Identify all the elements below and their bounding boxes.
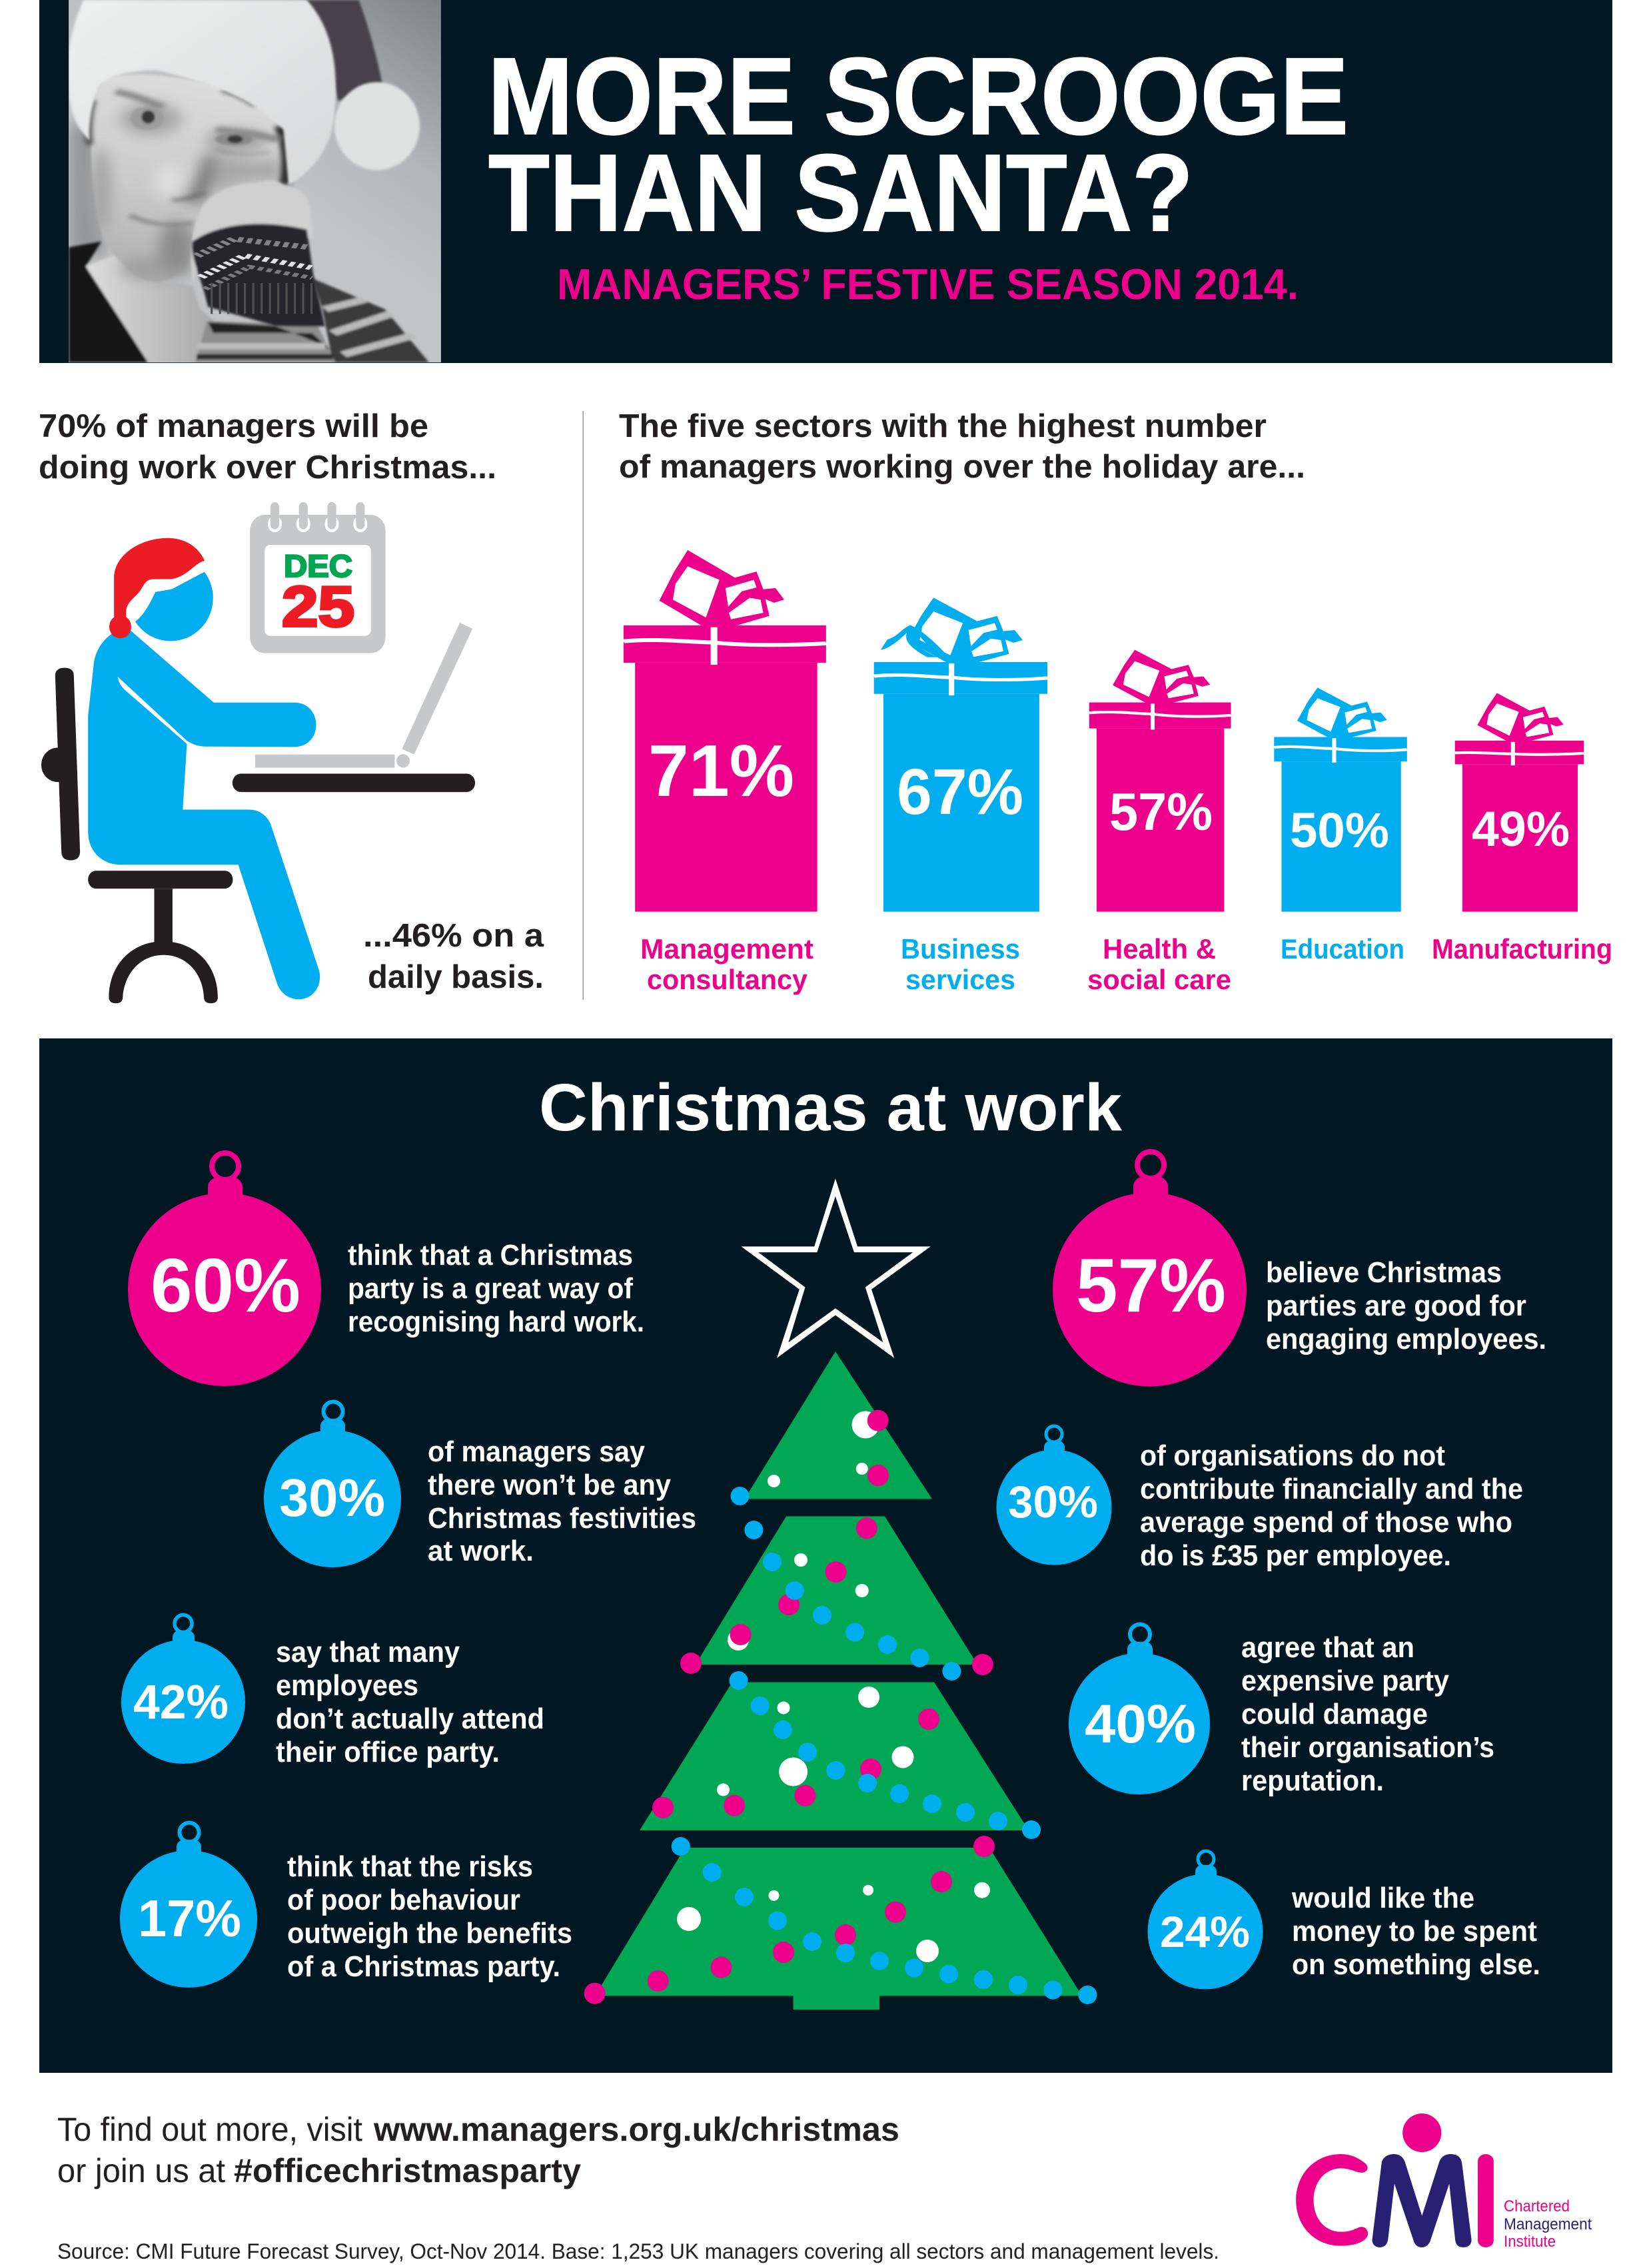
stat: 24%: 24% (1160, 1907, 1250, 1956)
stat: 30% no festivities: Christmas festivities (428, 1502, 696, 1535)
tree ornaments: blue (672, 1487, 1097, 2004)
heading: five sectors (619, 408, 1305, 485)
stat: 57%: engaging employees. (1266, 1323, 1546, 1355)
stat: 30% no financial contribution: contribute financially and the (1140, 1473, 1523, 1505)
logo: CMI (1296, 2113, 1592, 2251)
stat: 30% no financial contribution: 30% (1008, 1477, 1098, 1527)
stat: 57% (1053, 1152, 1546, 1387)
gift bar: management consultancy 71%: consultancy (647, 964, 808, 995)
christmas tree (584, 1351, 1097, 2010)
calendar date (282, 548, 354, 639)
photo: santa hat (69, 0, 420, 186)
stat: 42%: 42% (133, 1676, 229, 1729)
desk (233, 774, 475, 792)
heading: 70% of managers (39, 408, 496, 486)
footer call to action (57, 2111, 899, 2189)
stat: 30% no financial contribution: do is £35 per employee. (1140, 1539, 1451, 1572)
stat: 24%: on something else. (1292, 1948, 1540, 1981)
gift bar: business services 67% (874, 597, 1047, 995)
gift bar: health and social care 57%: Health & (1103, 933, 1216, 964)
icon: seated person (88, 538, 320, 999)
stat: 30% no financial contribution (997, 1426, 1523, 1572)
icon: laptop (255, 623, 472, 768)
heading: 70% of managers: doing work over Christmas... (39, 450, 496, 486)
tree ornaments: pink (584, 1410, 995, 2004)
stat: 40%: expensive party (1241, 1665, 1449, 1697)
stat: 57%: 57% (1076, 1244, 1226, 1328)
stat: 42%: don’t actually attend (276, 1702, 544, 1735)
gift bar: education 50%: 50% (1290, 803, 1389, 858)
title: THAN SANTA? (488, 132, 1193, 254)
stat: 57%: parties are good for (1266, 1290, 1526, 1322)
text: 46% on a daily basis: daily basis. (368, 959, 544, 995)
stat: 40%: agree that an (1241, 1631, 1414, 1664)
footer call to action: or join us at (57, 2152, 225, 2189)
heading: five sectors: The five sectors with the highest number (619, 408, 1267, 444)
stat: 42%: their office party. (276, 1736, 500, 1768)
stat: 17%: think that the risks (287, 1850, 533, 1883)
stat: 17%: of a Christmas party. (287, 1950, 560, 1983)
stat: 24%: money to be spent (1292, 1915, 1537, 1948)
stat: 60%: recognising hard work. (348, 1306, 644, 1338)
stat: 17%: 17% (138, 1889, 241, 1948)
stat: 40%: their organisation’s (1241, 1731, 1494, 1764)
stat: 30% no festivities: of managers say (428, 1435, 645, 1468)
stat: 17%: of poor behaviour (287, 1884, 520, 1916)
stat: 17% (120, 1822, 572, 1988)
gift bar: health and social care 57%: 57% (1109, 782, 1213, 841)
stat: 30% no festivities: at work. (428, 1535, 534, 1567)
photo shading: face (92, 103, 283, 280)
gift bar: manufacturing 49%: Manufacturing (1432, 933, 1612, 964)
logo: CMI: Chartered (1504, 2197, 1570, 2215)
stat: 24%: would like the (1291, 1882, 1474, 1914)
stat: 60%: 60% (151, 1244, 300, 1328)
gift bar: education 50%: Education (1281, 933, 1404, 964)
icon: star (742, 1178, 931, 1358)
logo: CMI: Institute (1504, 2233, 1556, 2251)
stat: 40%: reputation. (1241, 1764, 1384, 1797)
gift bar: business services 67%: Business (901, 933, 1020, 964)
title (488, 35, 1349, 254)
gift bar: health and social care 57% (1087, 650, 1231, 995)
footer call to action: www.managers.org.uk/christmas (373, 2111, 899, 2148)
stat: 30% no festivities: there won’t be any (428, 1469, 671, 1501)
gift bar: education 50% (1274, 687, 1407, 964)
stat: 60% (128, 1153, 644, 1386)
gift bar: health and social care 57%: social care (1087, 964, 1231, 995)
gift bar: manufacturing 49% (1432, 693, 1612, 964)
stat: 42%: say that many (276, 1636, 460, 1669)
stat: 42% (121, 1615, 544, 1768)
icon: calendar (250, 502, 386, 653)
subtitle: MANAGERS’ FESTIVE SEASON 2014. (557, 260, 1299, 308)
gift bar: management consultancy 71%: Management (640, 933, 814, 964)
stat: 40%: could damage (1241, 1698, 1428, 1730)
photo details: eyes, brows, mouth (89, 89, 287, 224)
stat: 24% (1147, 1851, 1540, 1989)
heading: 70% of managers: 70% of managers will be (39, 408, 428, 444)
stat: 30% no festivities: 30% (279, 1468, 385, 1527)
title: MORE SCROOGE (488, 35, 1349, 157)
text: 46% on a daily basis: ...46% on a (363, 918, 544, 954)
photo: man in Santa hat (69, 0, 441, 362)
stat: 60%: think that a Christmas (348, 1239, 633, 1272)
logo: CMI: Management (1504, 2215, 1592, 2233)
heading: five sectors: of managers working over the holiday are... (619, 449, 1305, 485)
tree ornaments: white (677, 1411, 990, 1962)
calendar date: 25 (282, 575, 354, 639)
stat: 60%: party is a great way of (348, 1272, 633, 1305)
heading: Christmas at work: Christmas at work (539, 1070, 1122, 1145)
stat: 30% no festivities (264, 1401, 696, 1567)
icon: office chair (41, 668, 233, 1003)
stat: 40% (1069, 1624, 1494, 1797)
stat: 42%: employees (276, 1669, 418, 1702)
gift bar: management consultancy 71%: 71% (648, 730, 794, 812)
footer call to action: #officechristmasparty (234, 2152, 581, 2189)
stat: 40%: 40% (1085, 1694, 1196, 1754)
gift bar: manufacturing 49%: 49% (1472, 801, 1570, 857)
stat: 57%: believe Christmas (1266, 1256, 1502, 1289)
photo: hand and cuff (191, 181, 325, 326)
text: 46% on a daily basis (363, 918, 544, 995)
stat: 17%: outweigh the benefits (287, 1917, 572, 1950)
stat: 30% no financial contribution: average spend of those who (1140, 1506, 1512, 1539)
gift bar: business services 67%: 67% (897, 755, 1023, 828)
gift bar: management consultancy 71% (624, 550, 826, 995)
gift bar: business services 67%: services (905, 964, 1015, 995)
bar chart: gift boxes by sector (624, 550, 1612, 995)
panel: Christmas at work (39, 1038, 1612, 2073)
illustration: manager working at laptop (41, 502, 475, 1003)
source note: Source: CMI Future Forecast Survey, Oct-Nov 2014. Base: 1,253 UK managers covering all sectors and management levels. (57, 2239, 1219, 2263)
footer call to action: To find out more, visit (57, 2111, 362, 2148)
calendar date: DEC (284, 548, 352, 583)
header banner (39, 0, 1612, 363)
stat: 30% no financial contribution: of organisations do not (1140, 1439, 1445, 1472)
